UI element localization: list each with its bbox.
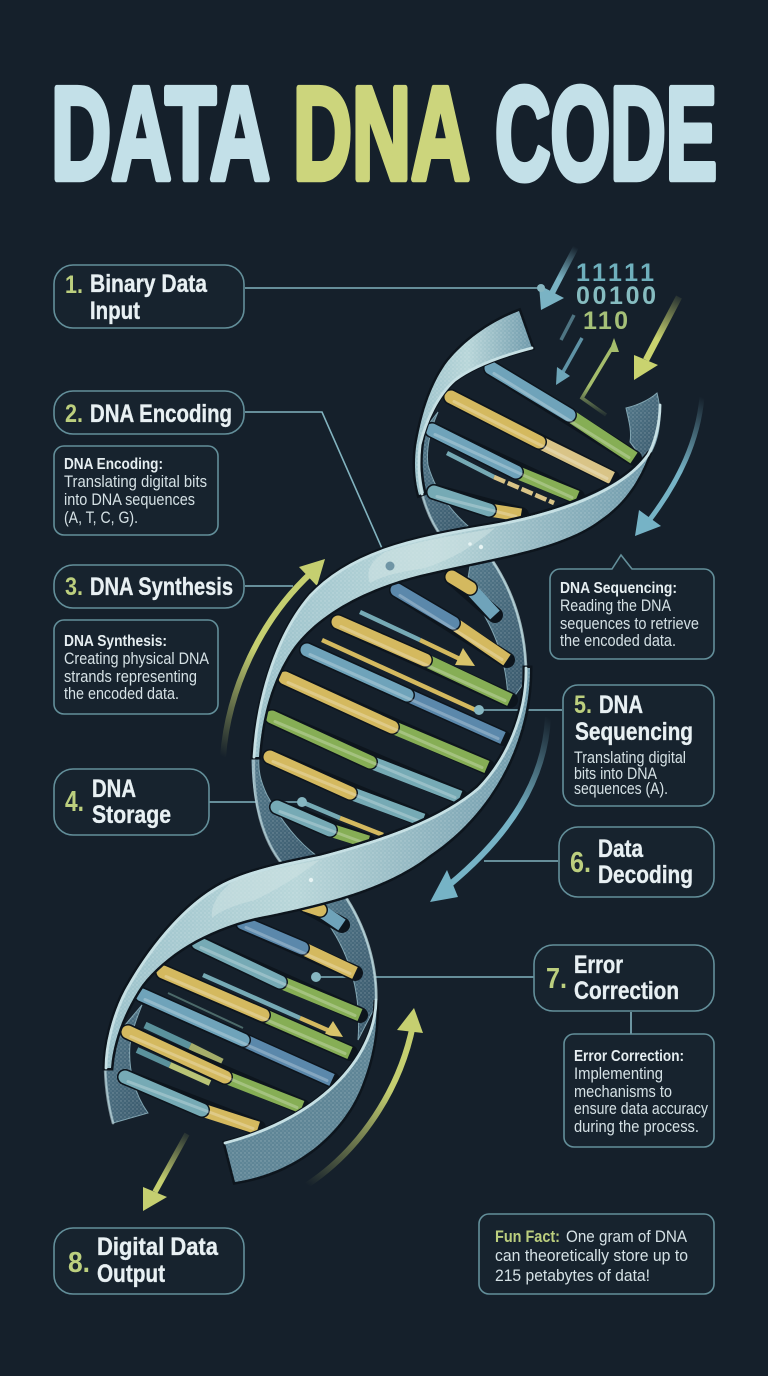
label 3: dna synthesis: 3. <box>65 573 83 601</box>
label 8: digital data output: 8. <box>68 1247 90 1279</box>
anchor dots <box>297 284 545 982</box>
label 2: dna encoding <box>54 391 244 434</box>
front strand: bottom end <box>225 1000 376 1182</box>
label 6: data decoding: Data <box>598 835 644 863</box>
arrow: small blue <box>556 315 582 385</box>
connector lines <box>209 288 631 1034</box>
label 7: error correction: Error <box>574 951 623 979</box>
arrow: left yellow curve <box>223 559 325 757</box>
note: dna synthesis: strands representing <box>64 668 197 686</box>
label 8: digital data output: Output <box>97 1260 166 1288</box>
dna helix <box>105 311 660 1182</box>
note: error correction: ensure data accuracy <box>574 1100 709 1118</box>
back strands <box>105 393 660 1123</box>
note: dna encoding: (A, T, C, G). <box>64 509 138 527</box>
label 4: dna storage <box>54 769 209 835</box>
front strand: top <box>415 311 532 495</box>
arrows <box>143 247 702 1211</box>
note: error correction <box>564 1034 714 1147</box>
note: dna synthesis: Creating physical DNA <box>64 650 209 668</box>
callout: fun fact: can theoretically store up to <box>495 1247 688 1265</box>
arrow: blue input <box>539 247 576 310</box>
label 1: binary data input: Input <box>90 297 141 325</box>
label 1: binary data input: 1. <box>65 271 83 299</box>
binary digits: 11111 <box>576 259 654 287</box>
note: error correction: Error Correction: <box>574 1048 684 1065</box>
front strand: lower crossing <box>105 668 530 1068</box>
callout: fun fact: Fun Fact: <box>495 1228 560 1246</box>
callout: fun fact: 215 petabytes of data! <box>495 1267 650 1285</box>
arrow: green bent <box>582 338 619 415</box>
label 7: error correction: 7. <box>546 963 567 995</box>
label 3: dna synthesis: DNA Synthesis <box>90 573 233 601</box>
front strand: upper crossing <box>253 405 660 757</box>
label 6: data decoding <box>559 827 714 897</box>
note: dna synthesis <box>54 620 218 714</box>
arrow: middle blue curve <box>430 717 548 902</box>
note: error correction: Implementing <box>574 1065 663 1083</box>
note: error correction: during the process. <box>574 1118 699 1136</box>
note: error correction: mechanisms to <box>574 1083 672 1101</box>
note: dna sequencing: the encoded data. <box>560 632 676 650</box>
title: DNA <box>293 60 470 207</box>
arrow: bottom yellow curve <box>307 1008 423 1185</box>
label 3: dna synthesis <box>54 565 244 608</box>
label 4: dna storage: 4. <box>65 786 84 818</box>
label 5: dna sequencing: DNA <box>599 691 643 719</box>
title: DATA <box>51 60 270 207</box>
arrow: right blue curve <box>635 397 702 536</box>
note: dna encoding <box>54 446 218 535</box>
label 2: dna encoding: 2. <box>65 400 83 428</box>
title <box>51 60 717 207</box>
callout: fun fact: One gram of DNA <box>566 1228 687 1246</box>
label 5: dna sequencing: 5. <box>574 691 592 719</box>
label 8: digital data output <box>54 1228 244 1294</box>
arrow: output yellow <box>143 1134 187 1211</box>
label 6: data decoding: 6. <box>570 847 591 879</box>
callout: fun fact <box>479 1214 714 1294</box>
label 2: dna encoding: DNA Encoding <box>90 400 232 428</box>
label 5: dna sequencing: Translating digital <box>574 749 686 767</box>
note: dna encoding: into DNA sequences <box>64 491 195 509</box>
note: dna sequencing: DNA Sequencing: <box>560 580 677 597</box>
arrow: yellow input <box>634 297 679 380</box>
note: dna encoding: DNA Encoding: <box>64 456 163 473</box>
label 5: dna sequencing: bits into DNA <box>574 765 657 783</box>
base pairs upper section <box>432 368 634 516</box>
binary digits <box>576 259 656 335</box>
label 6: data decoding: Decoding <box>598 861 693 889</box>
note: dna sequencing: sequences to retrieve <box>560 615 699 633</box>
note: dna encoding: Translating digital bits <box>64 473 207 491</box>
binary digits: 110 <box>583 307 628 335</box>
note: dna sequencing: Reading the DNA <box>560 597 671 615</box>
label 8: digital data output: Digital Data <box>97 1233 219 1261</box>
label 1: binary data input <box>54 265 244 328</box>
binary digits: 00100 <box>576 282 656 310</box>
label 5: dna sequencing <box>563 685 714 806</box>
label 7: error correction <box>534 945 714 1011</box>
label 5: dna sequencing: sequences (A). <box>574 780 668 798</box>
base pairs lower section <box>125 905 360 1128</box>
note: dna synthesis: the encoded data. <box>64 685 179 703</box>
label 1: binary data input: Binary Data <box>90 270 208 298</box>
note: dna sequencing <box>550 555 714 659</box>
note: dna synthesis: DNA Synthesis: <box>64 633 167 650</box>
label 7: error correction: Correction <box>574 977 679 1005</box>
label 5: dna sequencing: Sequencing <box>575 718 693 746</box>
label 4: dna storage: DNA <box>92 775 136 803</box>
base pairs middle section <box>270 577 510 842</box>
label 4: dna storage: Storage <box>92 801 171 829</box>
